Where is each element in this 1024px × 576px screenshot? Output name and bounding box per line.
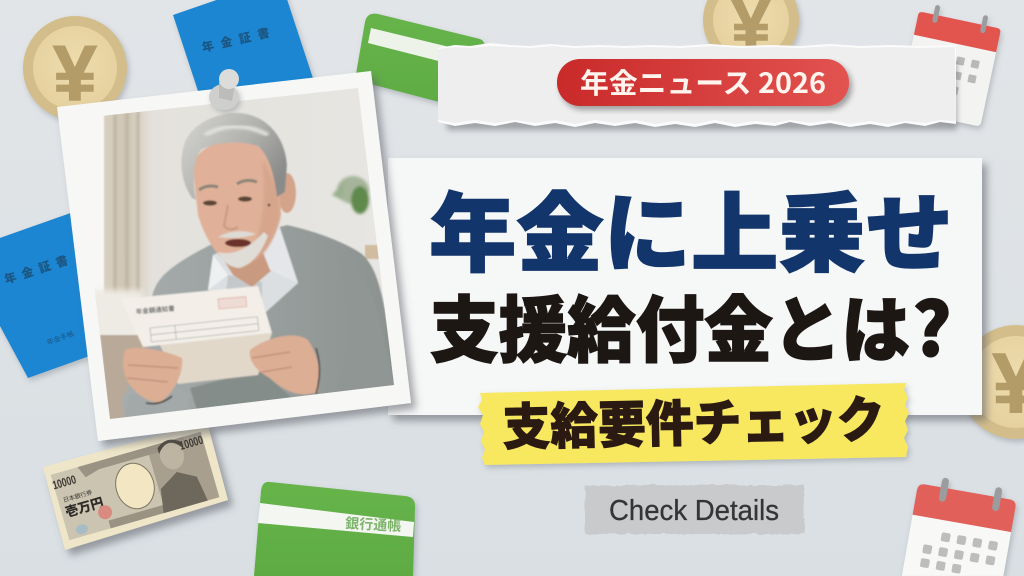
letter lower fold [160, 333, 272, 384]
right hand [250, 335, 320, 394]
icon: green passbook bottom [254, 482, 415, 576]
icon: yen coin top left [23, 16, 127, 120]
banner: yellow tape subtitle: 支給要件チェック [502, 380, 885, 460]
eyes and brows [203, 200, 217, 206]
sweater [122, 225, 397, 425]
icon: blue pension book top: 年金証書 [200, 22, 278, 56]
button: check details [585, 485, 804, 534]
left hand [123, 348, 182, 402]
collars [208, 255, 228, 290]
icon: calendar top right [898, 2, 1003, 127]
badge: news label: 年金ニュース 2026 [580, 62, 826, 102]
button: check details: Check Details [609, 495, 779, 527]
letter upper [121, 286, 272, 347]
heading: question mark: ? [912, 271, 952, 378]
icon: green passbook top [355, 14, 484, 110]
panel: torn paper header [438, 43, 957, 130]
icon: yen coin top centre [703, 0, 799, 68]
icon: calendar bottom right [902, 473, 1018, 576]
ear [278, 173, 296, 213]
icon: green passbook bottom: 銀行通帳 [345, 513, 402, 536]
face [193, 140, 281, 267]
icon: blue pension book left [0, 192, 190, 378]
hair [181, 113, 287, 200]
icon: ten thousand yen banknote: 壱万円 [63, 492, 106, 521]
icon: yen coin top left: ¥ [53, 29, 97, 117]
shirt [208, 252, 298, 312]
photo: elderly man reading letter: 年金額通知書 [135, 303, 176, 316]
panel: polaroid photo [57, 71, 411, 441]
heading: main title line 2: 支援給付金とは [430, 272, 910, 377]
icon: blue pension book left: 年金手帳 [46, 329, 75, 348]
icon: ten thousand yen banknote: 日本銀行券 [62, 487, 93, 504]
icon: yen coin right [959, 325, 1024, 439]
panel: main white title panel [388, 158, 982, 415]
photo: elderly man reading letter [94, 88, 394, 419]
heading: main title line 1: 年金に上乗せ [429, 164, 953, 289]
badge: news label [557, 59, 852, 110]
plant [332, 176, 369, 214]
icon: ten thousand yen banknote: 10000 [51, 472, 78, 492]
icon: ten thousand yen banknote: 10000 [178, 433, 205, 453]
icon: blue pension book top [173, 0, 330, 167]
moustache and beard [218, 231, 256, 238]
neck [225, 252, 272, 287]
icon: push pin [209, 69, 239, 110]
icon: ten thousand yen banknote [43, 422, 228, 550]
icon: blue pension book left: 年金証書 [2, 249, 76, 288]
